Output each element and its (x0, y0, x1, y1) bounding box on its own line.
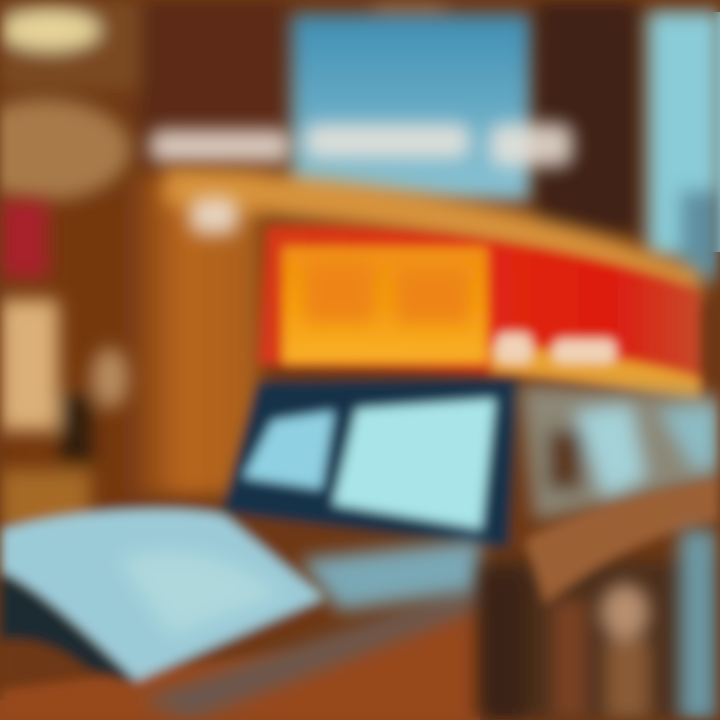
tablet: left screen (242, 410, 335, 490)
open book (0, 509, 325, 682)
blurred white headline (150, 124, 572, 166)
window: right (648, 12, 720, 280)
banner: orange block text (305, 262, 470, 323)
railing: balusters (480, 530, 716, 720)
banner: lower yellow stripe (490, 345, 700, 405)
left wall: red sign and shelf (0, 200, 128, 530)
wooden pillar (130, 170, 700, 495)
tablet (222, 378, 518, 548)
window: centre (292, 0, 532, 200)
tablet: right screen (332, 398, 496, 530)
shelf items right of tablet (520, 385, 720, 520)
banner: white text blur (495, 332, 617, 364)
pillar: white text fragment (190, 198, 238, 234)
wooden desk (0, 540, 490, 720)
railing, bottom right (480, 478, 720, 720)
ceiling and lamps, top left (0, 0, 290, 200)
banner: yellow panel (282, 246, 488, 364)
red and yellow banner (258, 226, 700, 405)
dark wood column (535, 0, 640, 235)
